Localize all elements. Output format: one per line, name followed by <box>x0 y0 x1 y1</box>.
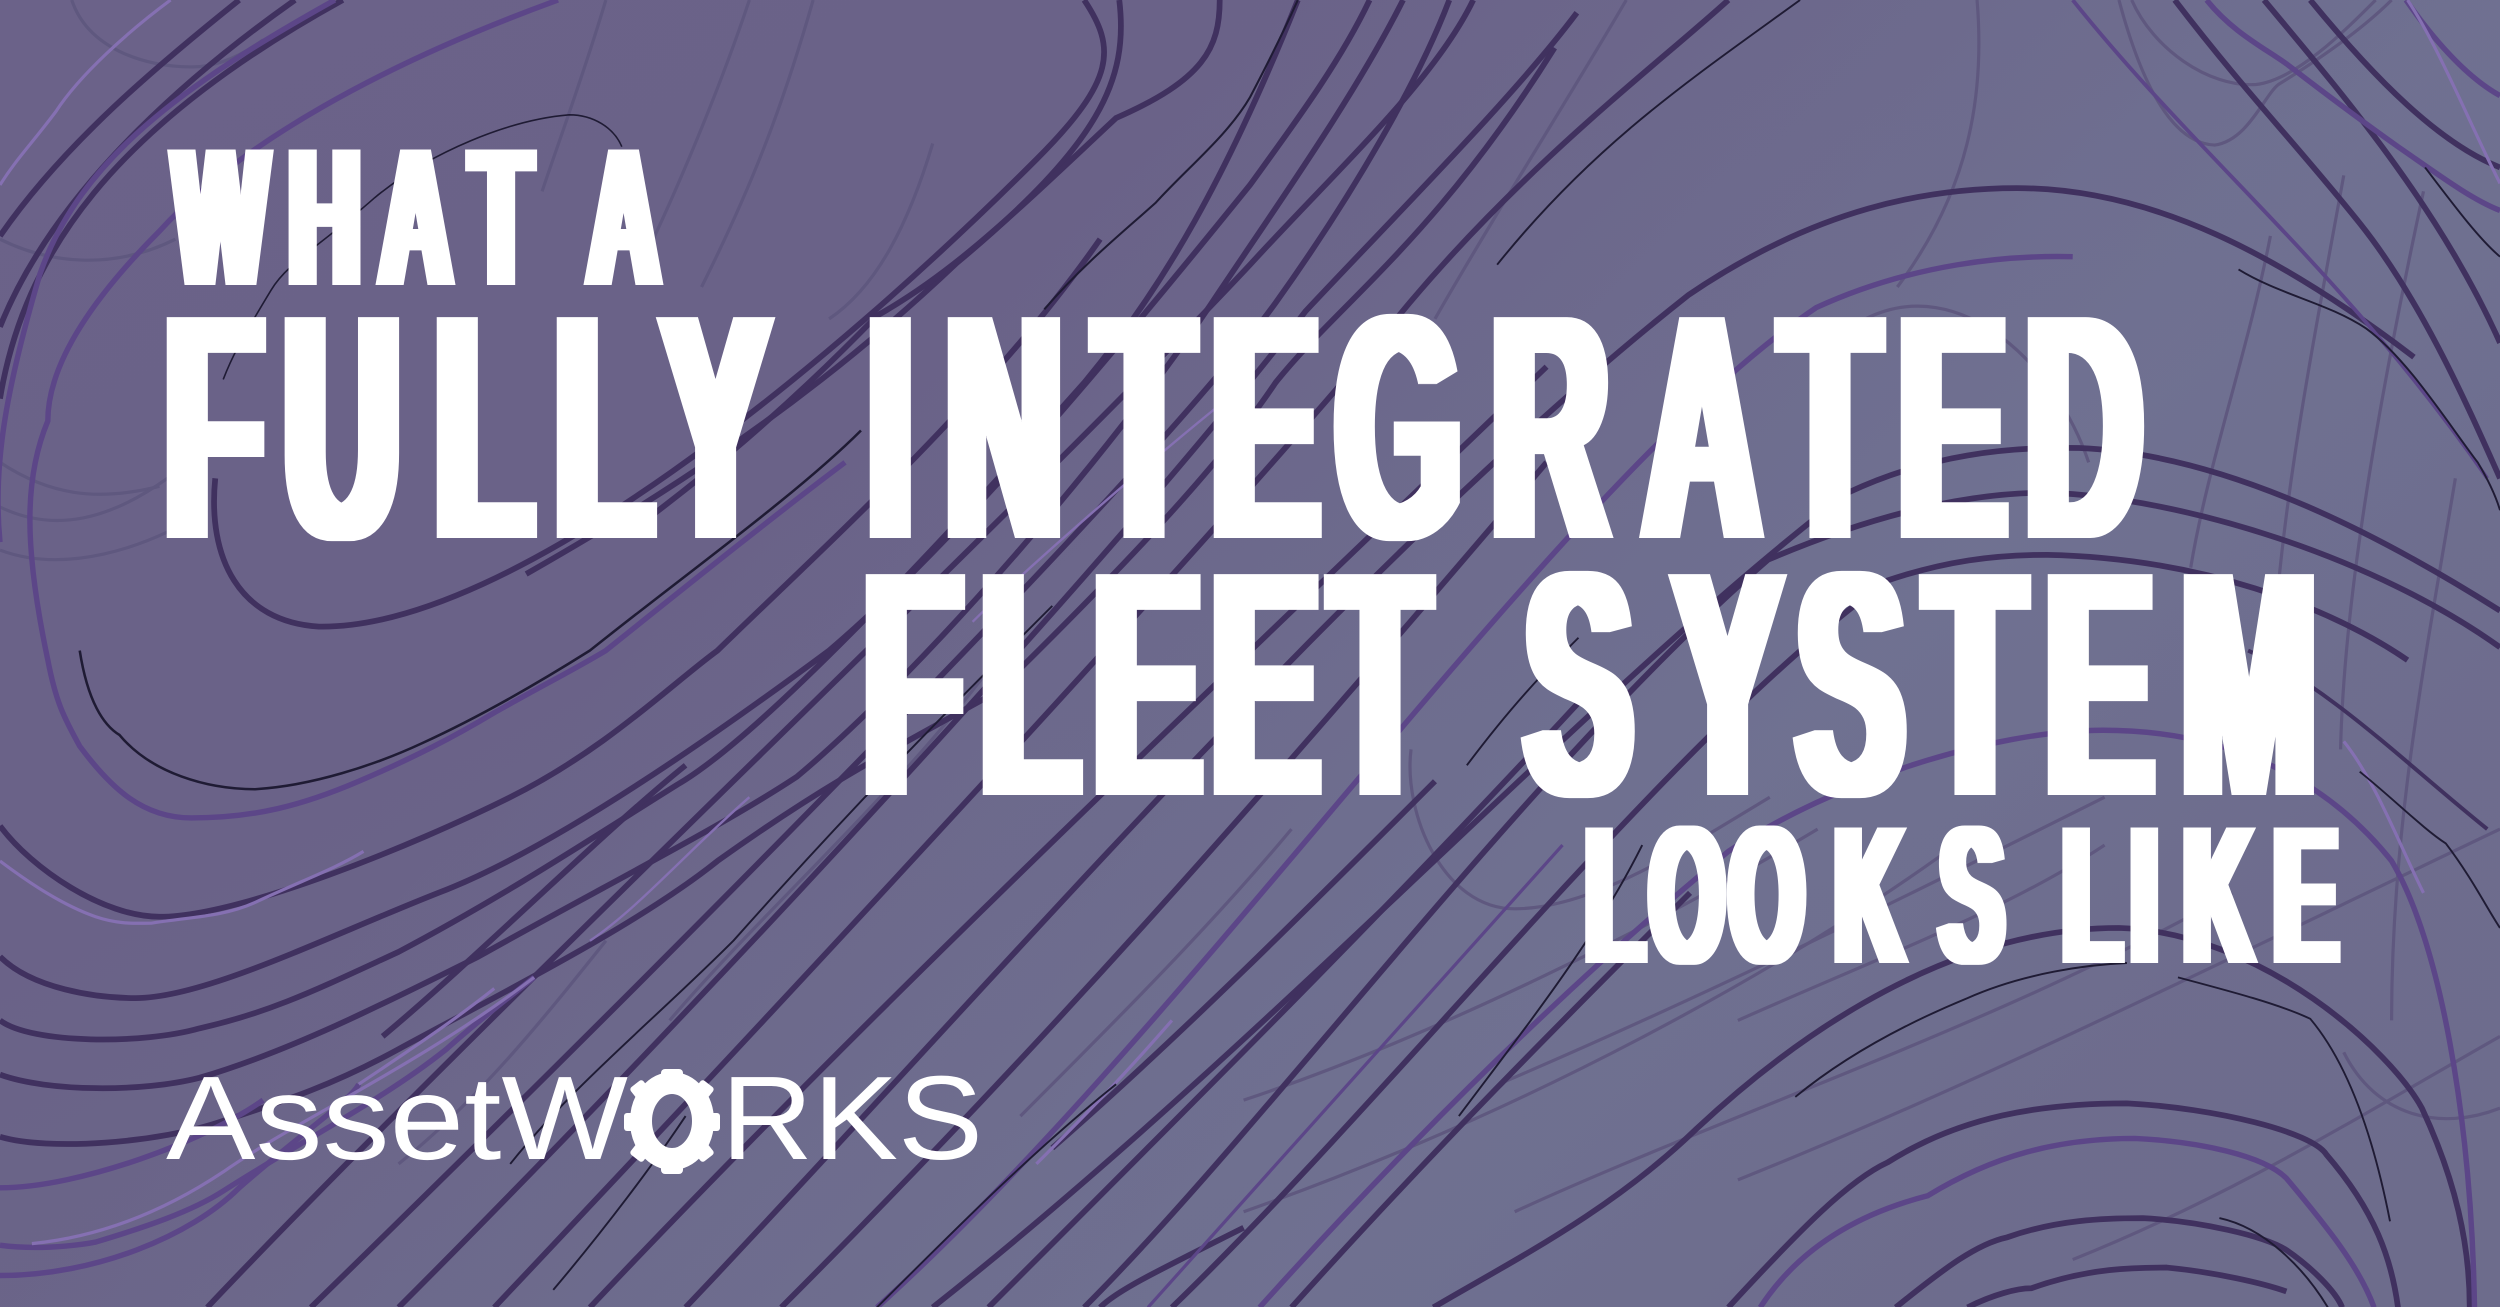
title line: LOOKS LIKE: LOOKS LIKE <box>1586 785 2337 1005</box>
icon: gear letter O <box>624 1069 720 1174</box>
logo text: RKS: RKS <box>721 1052 983 1185</box>
logo: AssetWORKS <box>166 1052 983 1185</box>
logo text: Asset W: AssetW <box>166 1052 628 1185</box>
title line: WHAT A: WHAT A <box>174 108 659 328</box>
title line: FLEET SYSTEM: FLEET SYSTEM <box>864 504 2316 863</box>
title <box>165 108 2337 1005</box>
title line: FULLY INTEGRATED: FULLY INTEGRATED <box>165 247 2142 606</box>
